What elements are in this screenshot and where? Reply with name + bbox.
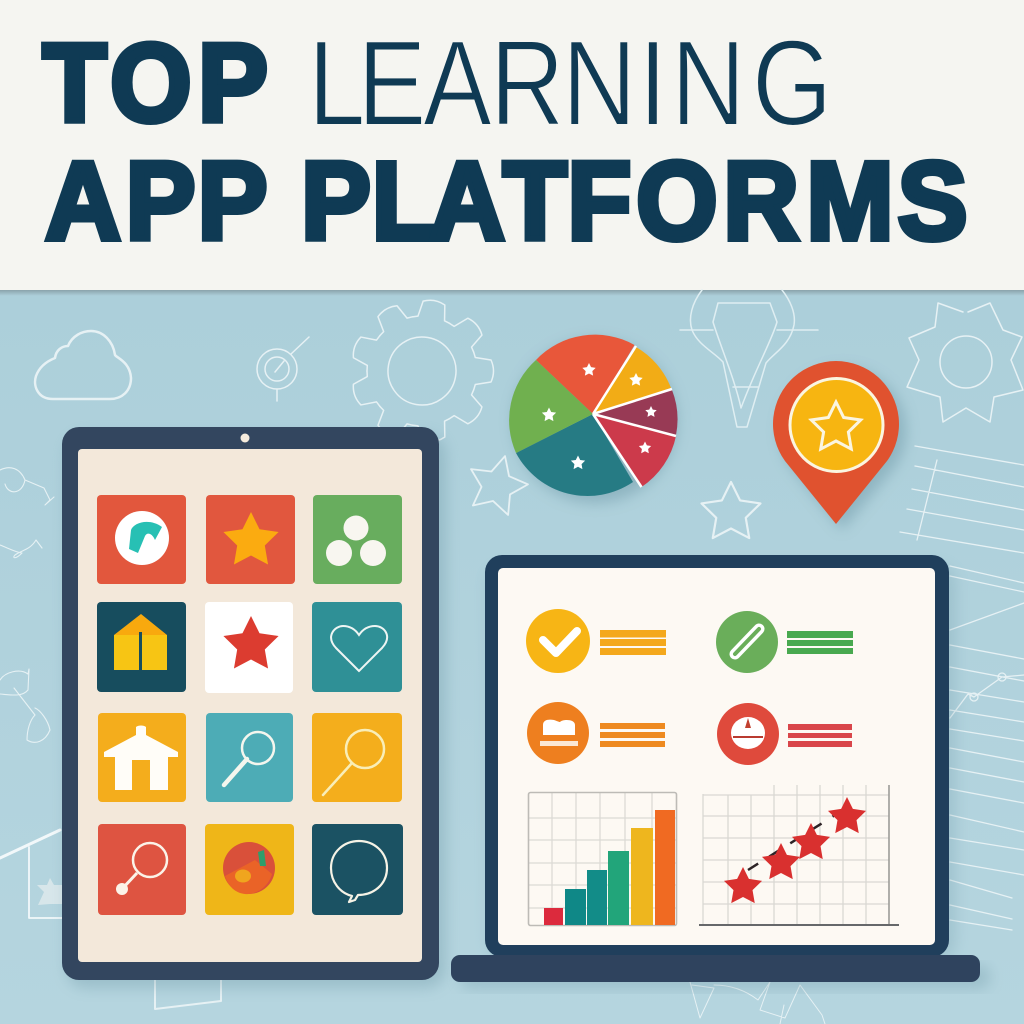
app tile: red with teal arc [97,495,186,584]
app tile: yellow with magnifier [312,713,402,802]
background line art [0,288,1024,1024]
map pin shadow [780,368,906,530]
status row: green paperclip [716,611,853,673]
laptop base [451,955,980,982]
left molecule sketches [0,468,54,742]
app tile: light teal with magnifier [206,713,293,802]
title: LEARNING [308,15,832,151]
bar chart [528,792,677,926]
app tile: red with yellow star [206,495,295,584]
laptop shadow [488,565,956,960]
bottom sketches [155,980,825,1024]
app tile: yellow with white house [98,713,186,802]
status row: orange book [527,702,665,764]
icon: star outline left [462,448,533,518]
laptop base shadow [460,965,990,989]
app tile: yellow with red globe [205,824,294,915]
icon: light bulb outline [680,290,818,427]
map pin with star [773,361,899,524]
app tile: teal with heart [312,602,402,692]
status row: yellow check [526,609,666,673]
icon: target dial [257,337,309,401]
camera dot [240,434,250,442]
pie chart [509,335,678,496]
laptop device [451,555,980,982]
main illustration background [0,290,1024,1024]
right chart lines [900,446,1024,930]
icon: cloud outline [35,331,131,399]
title: TOP [43,22,268,145]
app tile: red with magnifier dot [98,824,186,915]
star rating line chart [699,785,899,925]
icon: star outline centre [702,482,760,538]
app tile: white with red star [205,602,293,693]
title [43,15,967,263]
tablet shadow [66,434,446,988]
icon: gear right [907,303,1023,422]
tablet device [62,427,439,980]
icon: gear left [337,288,507,456]
house sketch lower left [0,830,62,918]
app tile: dark with yellow house [97,602,186,692]
app tile: dark with speech bubble [312,824,403,915]
status row: red mouth [717,703,852,765]
header band [0,0,1024,290]
title: APP PLATFORMS [45,140,967,263]
pie chart shadow [513,339,677,503]
app tile: green with three dots [313,495,402,584]
